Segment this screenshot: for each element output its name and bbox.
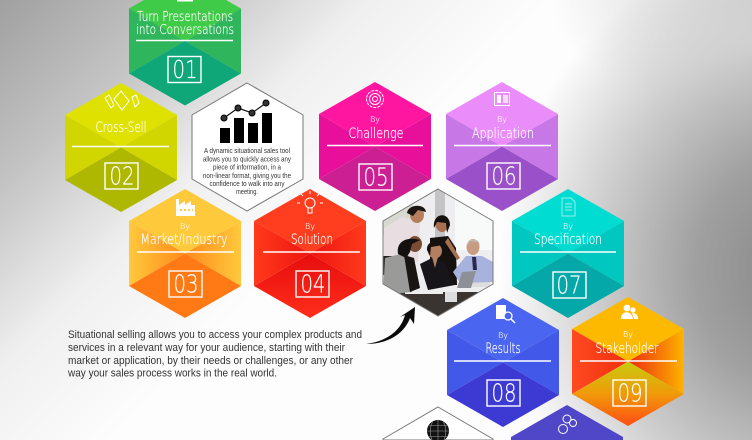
paragraph: situational selling [67,329,362,380]
hexagon 07: Specification: Specification [534,232,602,248]
bar chart icon [220,100,272,143]
hexagon 01: Turn Presentations into Conversations: into Conversations [136,23,234,38]
hexagon 06: Application: Application [472,126,534,142]
hexagon 08: Results [447,298,559,427]
hexagon 06: Application [446,82,558,211]
hexagon 01: Turn Presentations into Conversations: Turn Presentations [137,10,233,25]
description text: A dynamic situational sales tool [204,148,290,155]
icon: price tags [105,91,139,110]
hexagon 09: Stakeholder: Stakeholder [596,341,659,357]
hexagon 08: Results: Results [486,341,520,357]
paragraph: situational selling: way your sales process works in the real world. [67,368,277,380]
description text: allows you to quickly access any [203,156,291,164]
paragraph: situational selling: services in a relevant way for your audience, starting with their [68,342,345,354]
icon: clipboard and magnifier [496,305,515,323]
hexagon 04: Solution: Solution [291,232,333,248]
hexagon 05: Challenge: By [370,115,380,124]
white hexagon bottom with globe icon [383,407,493,440]
hexagon 09: Stakeholder: By [623,330,633,339]
photo hexagon: business team [383,189,495,320]
hexagon 06: Application: 06 [492,162,516,190]
hexagon 02: Cross-Sell: Cross-Sell [96,120,146,136]
icon: document [562,198,575,216]
standing man [384,217,420,262]
icon: coins [558,415,576,434]
older man [453,256,493,283]
hexagon 03: Market/Industry: 03 [174,270,198,298]
hexagon 02: Cross-Sell [65,83,177,212]
paragraph: situational selling: Situational selling allows you to access your complex products and [68,329,362,341]
hexagon 02: Cross-Sell: 02 [110,162,134,190]
white hexagon: sales tool description [192,83,303,211]
description text [203,148,291,196]
standing woman [430,236,457,285]
hexagon 05: Challenge: Challenge [348,126,404,142]
tablet [457,271,476,288]
icon: people [621,305,638,319]
hexagon 09: Stakeholder: 09 [618,378,642,408]
hexagon 08: Results: By [498,331,508,340]
hexagon 06: Application: By [497,115,507,124]
description text: meeting. [236,189,258,196]
hexagon 07: Specification [512,189,624,318]
description text: piece of information, in a [213,164,281,172]
icon: maze [366,90,384,108]
icon: factory [176,199,195,216]
woman with grey jacket [384,254,412,294]
hexagon 09: Stakeholder [572,297,684,426]
hexagon 03: Market/Industry: Market/Industry [140,232,228,248]
hexagon 08: Results: 08 [492,378,516,408]
hexagon 03: Market/Industry [129,189,241,318]
paragraph: situational selling: market or application, by their needs or challenges, or any other [68,355,353,367]
woman in black jacket [420,258,455,290]
hexagon 01: Turn Presentations into Conversations [129,0,241,106]
hexagon 05: Challenge: 05 [364,162,388,192]
purple hexagon bottom with coins icon [511,405,623,440]
icon: globe [427,420,449,440]
arrow pointing to photo [366,307,415,344]
hexagon 03: Market/Industry: By [180,222,190,231]
hexagon 07: Specification: 07 [556,270,582,300]
hexagon 04: Solution: By [305,222,315,231]
table [400,292,478,316]
hexagon 05: Challenge [319,82,431,211]
hexagon 07: Specification: By [563,222,573,231]
hexagon 04: Solution [254,189,366,318]
description text: confidence to walk into any [210,181,285,188]
icon: application window [494,92,510,106]
description text: non-linear format, giving you the [203,173,291,180]
hexagon 01: Turn Presentations into Conversations: 01 [172,55,198,84]
icon: light bulb [297,191,323,213]
hexagon 04: Solution: 04 [300,270,326,298]
